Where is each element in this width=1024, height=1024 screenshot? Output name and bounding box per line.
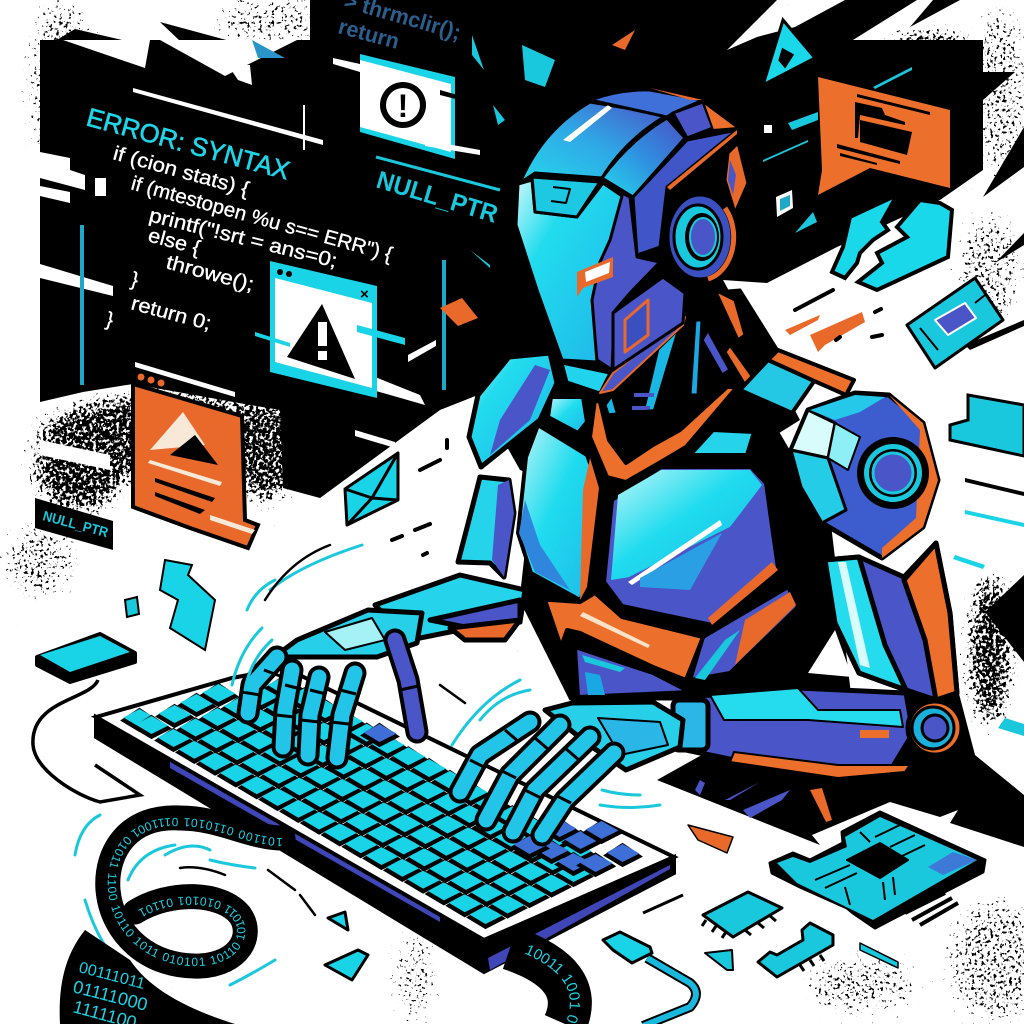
blue strokes in shadow: [695, 780, 832, 822]
upper chest tab: [690, 430, 754, 455]
code line 1: if (cion stats) {: [111, 143, 252, 201]
icon: connector: [758, 923, 833, 977]
upper left collar piece: [548, 397, 587, 433]
body: left shoulder: [469, 353, 557, 467]
body: left upper arm: [458, 477, 514, 577]
right chest plate: [604, 467, 778, 625]
cable left: [33, 680, 140, 802]
keyboard: corner key: [122, 709, 158, 731]
code block: [83, 102, 395, 335]
head: orange crest: [703, 102, 738, 130]
label: NULL_PTR small tag: NULL_PTR: [41, 507, 110, 540]
keyboard: [96, 668, 674, 972]
ribbon text right: 10011 1001 0101: [525, 946, 580, 1023]
black backdrop shards: [40, 0, 1024, 847]
head: side vent: [613, 277, 685, 370]
head: face blue side: [588, 183, 660, 370]
neck: [590, 290, 790, 445]
body: right shoulder: [791, 393, 938, 558]
code line 8: }: [104, 309, 116, 332]
dialog: orange error window: [133, 374, 258, 548]
dialog: pixel alert: [333, 54, 480, 159]
small cyan chip: [125, 597, 139, 617]
icon: circuit board top right: [907, 278, 1003, 368]
code lines: [104, 143, 395, 335]
head: orange edge: [667, 130, 737, 190]
code line 4: else {: [146, 225, 203, 260]
head: silhouette: [518, 88, 748, 393]
icon: small circuit left: [37, 634, 135, 682]
head: top strip: [590, 90, 703, 117]
icon: broken cyan fragment right: [858, 200, 952, 290]
ink dashes: [392, 290, 946, 555]
icon: right side fragments: [950, 320, 1024, 736]
head: visor: [532, 177, 600, 217]
head: ear ring: [667, 194, 734, 280]
robot: [375, 88, 962, 822]
icon: broken cyan fragment left: [832, 195, 897, 278]
binary ribbon: [60, 805, 592, 1024]
dialog: pixel alert: !: [398, 88, 408, 124]
keyboard: rows: [134, 676, 641, 928]
right hand over keyboard: [460, 702, 683, 835]
abdomen orange: [545, 593, 703, 680]
white gap between torso and arm: [808, 630, 852, 677]
code line 3: printf("!srt = ans=0;: [147, 205, 339, 273]
small orange fragment: [440, 298, 478, 326]
code line 5: throwe();: [164, 252, 256, 296]
icon: USB cable: [603, 932, 696, 1024]
head: crown band: [602, 118, 685, 197]
head: chin: [562, 363, 610, 393]
head: face plate: [516, 180, 622, 362]
head: orange status light: [577, 257, 613, 297]
orange collar: [590, 387, 737, 482]
left hand over keyboard: [242, 610, 422, 758]
motion lines: [75, 545, 660, 985]
icon: envelope: [345, 453, 398, 525]
keyboard: top: [96, 668, 674, 940]
ribbon text: 101100 0110101 0111001 01011 1100 10110 1011 010101 10110 101011 010101 0110101 011010 1010110: [108, 818, 282, 966]
heading: error syntax: ERROR: SYNTAX: [83, 102, 293, 186]
label: NULL_PTR small tag: [35, 498, 113, 550]
body: torso: [518, 350, 854, 697]
keyboard: side: [96, 717, 674, 972]
ribbon text lower 2: 01111000: [74, 980, 147, 1010]
small debris pieces: [643, 895, 898, 970]
top code fragment: return: [336, 14, 402, 54]
cyan vertical glitch lines: [80, 225, 446, 390]
abdomen left: [575, 647, 690, 697]
body: black torso backing: [520, 400, 850, 700]
code line 2: if (mtestopen %u s== ERR") {: [129, 173, 395, 266]
icon: circuit board bottom right: [770, 812, 985, 928]
ink motion strokes: [180, 545, 465, 915]
floating shards on dark background: [470, 20, 912, 268]
head: crown back: [673, 102, 713, 138]
head: [516, 88, 748, 393]
left chest plate: [518, 425, 599, 600]
dome highlight: [563, 105, 612, 142]
shoulder block: [740, 360, 815, 413]
icon: cyan code fragment: [160, 560, 215, 650]
head: dome: [520, 102, 667, 183]
body: right upper arm: [825, 543, 957, 700]
right forearm: [673, 688, 962, 778]
dialog: warning triangle: [255, 261, 405, 398]
head: jaw strip: [600, 317, 685, 393]
dialog: warning triangle: ×: [360, 286, 369, 303]
code line 7: return 0;: [129, 293, 214, 335]
head: ear plate: [725, 143, 748, 213]
icon: orange folder panel: [818, 77, 950, 195]
ribbon text lower: 00111011: [80, 962, 143, 989]
head: crown orange edge: [650, 88, 703, 100]
white glitch stripes on code panel: [40, 40, 436, 470]
abdomen right: [690, 587, 798, 680]
dialog: orange error window: ×: [225, 397, 235, 416]
code line 6: }: [129, 269, 141, 292]
debris shards on desk: [325, 825, 733, 980]
left forearm: [375, 575, 525, 640]
icon: small chip: [702, 892, 782, 938]
orange speed marks: [785, 312, 865, 352]
label: NULL_PTR large: NULL_PTR: [373, 166, 501, 229]
head: side panel: [633, 130, 737, 255]
